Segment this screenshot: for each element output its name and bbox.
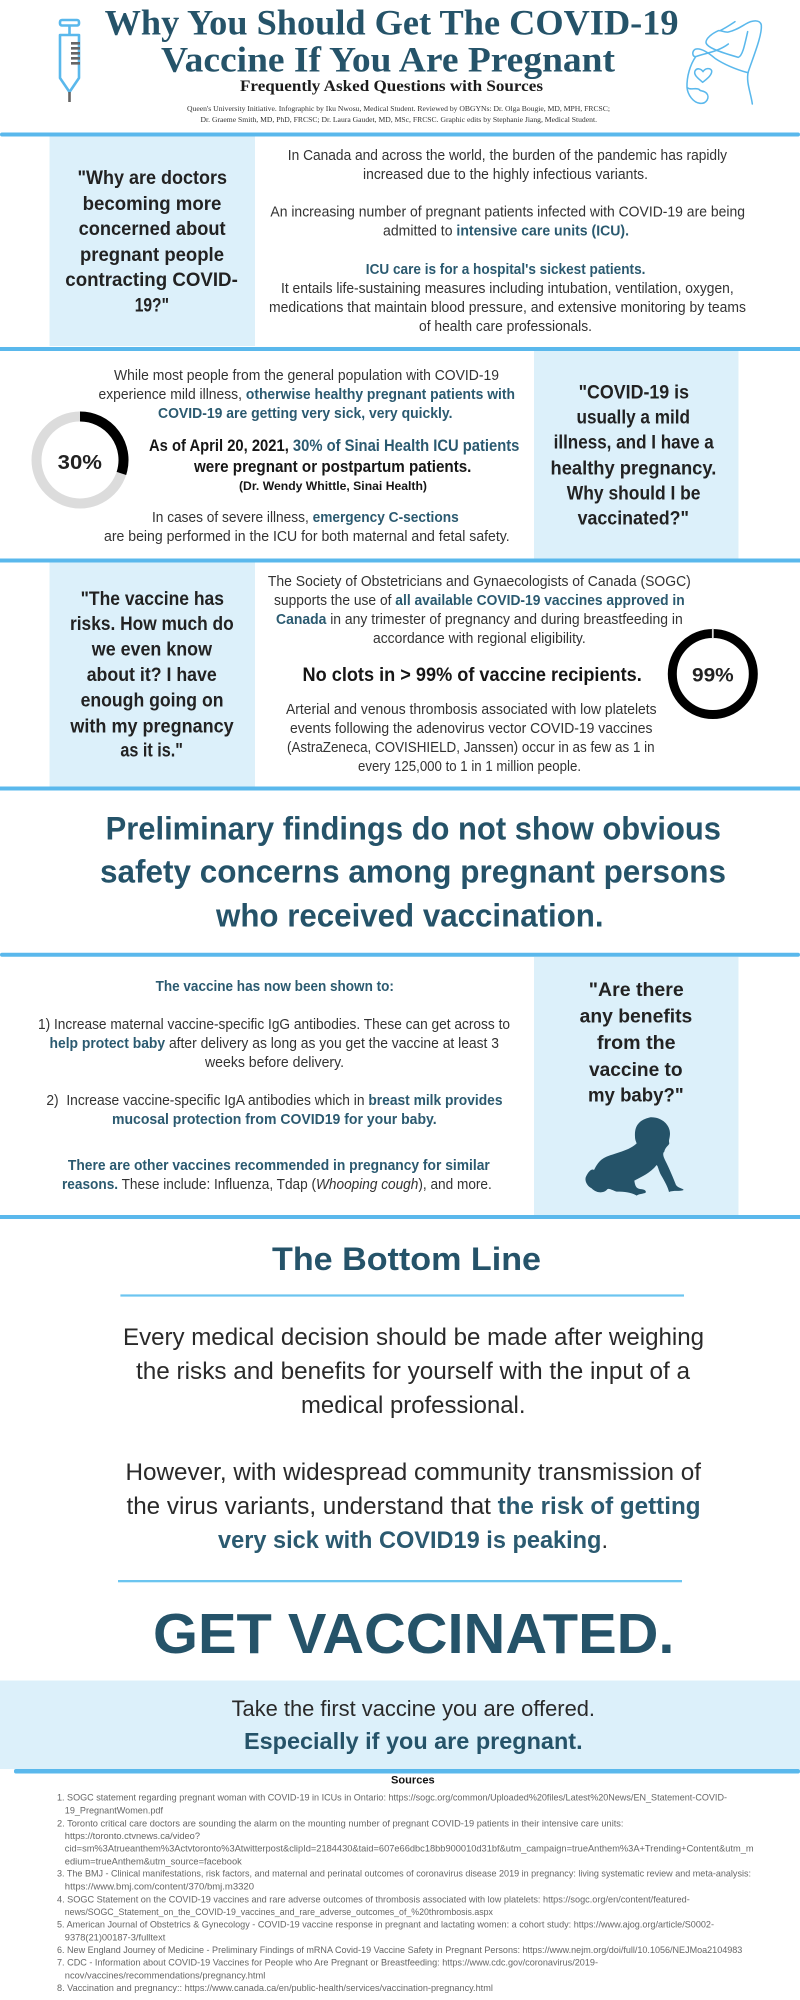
text block: mild illness: COVID-19 are getting very sick, very quickly.: [158, 406, 452, 422]
sources: 5. American Journal of Obstetrics & Gynecology - COVID-19 vaccine response in pregnant and lactating women: a cohort study: https://www.ajog.org/article/S0002-: [57, 1920, 714, 1931]
panel: benefits to baby question: [534, 957, 738, 1215]
text block: mild illness: [98, 368, 515, 422]
question: benefits to baby: any benefits: [580, 1007, 692, 1028]
title: Why You Should Get The COVID-19: [105, 2, 679, 42]
question: why are doctors concerned: contracting COVID-: [65, 270, 238, 291]
text block: thrombosis: events following the adenovirus vector COVID-19 vaccines: [290, 721, 652, 737]
sources: https://toronto.ctvnews.ca/video?: [65, 1831, 200, 1842]
text block: ICU burden: In Canada and across the world, the burden of the pandemic has rapidly: [288, 148, 728, 164]
question: why are doctors concerned: [65, 168, 238, 317]
question: why are doctors concerned: "Why are doctors: [78, 168, 227, 189]
panel: vaccine risks question: [50, 562, 255, 786]
text block: thrombosis: Arterial and venous thrombosis associated with low platelets: [286, 702, 657, 718]
icon: pregnant woman outline: [687, 21, 761, 104]
question: mild illness: healthy pregnancy.: [550, 458, 716, 479]
text block: vaccine benefits: 1) Increase maternal vaccine-specific IgG antibodies. These can get across to: [38, 1017, 510, 1033]
sources: 9378(21)00187-3/fulltext: [65, 1932, 166, 1943]
text block: vaccine benefits: There are other vaccines recommended in pregnancy for similar: [68, 1158, 490, 1174]
question: benefits to baby: my baby?": [588, 1086, 684, 1107]
question: vaccine risks: about it? I have: [87, 665, 217, 686]
panel: take the first vaccine: Especially if you are pregnant.: [244, 1728, 583, 1754]
sources: [57, 1775, 754, 1994]
question: why are doctors concerned: becoming more: [83, 194, 221, 215]
heading: the bottom line: The Bottom Line: [272, 1241, 541, 1277]
text block: SOGC support: [268, 574, 691, 647]
sources: 19_PregnantWomen.pdf: [65, 1805, 163, 1816]
text block: thrombosis: [286, 702, 657, 775]
sources: Sources: [391, 1775, 435, 1787]
text block: mild illness: experience mild illness, otherwise healthy pregnant patients with: [98, 387, 515, 403]
question: vaccine risks: with my pregnancy: [69, 716, 234, 737]
text block: ICU burden: ICU care is for a hospital's sickest patients.: [366, 262, 645, 278]
question: mild illness: vaccinated?": [578, 508, 689, 529]
text block: mild illness: While most people from the general population with COVID-19: [114, 368, 499, 384]
icon: crawling baby: [585, 1117, 684, 1196]
text block: vaccine benefits: help protect baby after delivery as long as you get the vaccine at least 3: [50, 1036, 499, 1052]
question: mild illness: Why should I be: [567, 483, 700, 504]
text block: ICU burden: [269, 148, 746, 335]
stat: Sinai Health ICU: [149, 437, 519, 493]
text block: vaccine benefits: 2) Increase vaccine-specific IgA antibodies which in breast milk provides: [46, 1093, 503, 1109]
panel: why are doctors concerned: [50, 136, 255, 346]
text block: medical decision: medical professional.: [301, 1392, 526, 1419]
text block: vaccine benefits: weeks before delivery.: [204, 1055, 344, 1071]
text block: ICU burden: It entails life-sustaining measures including intubation, ventilation, oxygen,: [281, 281, 734, 297]
question: mild illness: usually a mild: [576, 407, 690, 428]
stat: Sinai Health ICU: As of April 20, 2021, 30% of Sinai Health ICU patients: [149, 437, 519, 455]
subtitle: Frequently Asked Questions with Sources: [240, 78, 543, 95]
chart: 99% donut: 99%: [692, 666, 734, 687]
text block: thrombosis: (AstraZeneca, COVISHIELD, Janssen) occur in as few as 1 in: [287, 740, 655, 756]
sources: 1. SOGC statement regarding pregnant woman with COVID-19 in ICUs in Ontario: https://sogc.org/common/Uploaded%20files/Latest%20News/EN_Statement-COVID-: [57, 1792, 727, 1803]
text block: C-sections: [104, 510, 510, 545]
chart: 30% donut: 30%: [58, 452, 102, 474]
question: mild illness: "COVID-19 is: [579, 382, 689, 403]
text block: SOGC support: Canada in any trimester of pregnancy and during breastfeeding in: [276, 612, 683, 628]
credits: Dr. Graeme Smith, MD, PhD, FRCSC; Dr. Laura Gaudet, MD, MSc, FRCSC. Graphic edits by Stephanie Jiang, Medical Student.: [200, 115, 597, 124]
question: benefits to baby: from the: [597, 1033, 676, 1054]
question: why are doctors concerned: concerned about: [79, 219, 226, 240]
sources: 2. Toronto critical care doctors are sounding the alarm on the mounting number of pregnant COVID-19 patients in their intensive care units:: [57, 1819, 624, 1830]
stat: Sinai Health ICU: were pregnant or postpartum patients.: [193, 458, 471, 476]
question: why are doctors concerned: 19?": [135, 296, 169, 317]
icon: syringe: [60, 20, 80, 102]
question: vaccine risks: as it is.": [120, 741, 183, 762]
text block: thrombosis: every 125,000 to 1 in 1 million people.: [358, 759, 581, 775]
sources: 8. Vaccination and pregnancy:: https://www.canada.ca/en/public-health/services/vaccination-pregnancy.html: [57, 1983, 493, 1994]
question: mild illness: illness, and I have a: [554, 432, 714, 453]
title: [105, 2, 679, 80]
question: vaccine risks: [69, 589, 234, 762]
credits: Queen's University Initiative. Infographic by Iku Nwosu, Medical Student. Reviewed by OBGYNs: Dr. Olga Bougie, MD, MPH, FRCSC;: [187, 104, 610, 113]
sources: ncov/vaccines/recommendations/pregnancy.html: [65, 1970, 265, 1981]
text block: vaccine benefits: mucosal protection from COVID19 for your baby.: [112, 1112, 437, 1128]
heading: preliminary findings: [100, 810, 726, 933]
question: benefits to baby: vaccine to: [589, 1060, 683, 1081]
sources: news/SOGC_Statement_on_the_COVID-19_vaccines_and_rare_adverse_outcomes_of_%20thrombosis.aspx: [65, 1907, 493, 1918]
text block: ICU burden: admitted to intensive care units (ICU).: [383, 224, 629, 240]
text block: medical decision: very sick with COVID19 is peaking.: [218, 1527, 608, 1554]
text block: SOGC support: The Society of Obstetricians and Gynaecologists of Canada (SOGC): [268, 574, 691, 590]
text block: medical decision: the risks and benefits for yourself with the input of a: [136, 1358, 691, 1385]
question: mild illness: [550, 382, 716, 529]
question: why are doctors concerned: pregnant people: [80, 245, 224, 266]
text block: vaccine benefits: [38, 979, 510, 1193]
text block: medical decision: the virus variants, understand that the risk of getting: [126, 1493, 700, 1520]
text block: medical decision: Every medical decision should be made after weighing: [123, 1324, 704, 1351]
text block: ICU burden: of health care professionals.: [419, 319, 592, 335]
sources: cid=sm%3Atrueanthem%3Actvtoronto%3Atwitterpost&clipId=2184430&taid=607e66dbc18bb900010d31bf&utm_campaign=trueAnthem%3A+Trending+Content&utm_m: [65, 1844, 754, 1855]
question: vaccine risks: enough going on: [81, 690, 223, 711]
sources: 3. The BMJ - Clinical manifestations, risk factors, and maternal and perinatal outcomes of coronavirus disease 2019 in pregnancy: living systematic review and meta-analysis:: [57, 1869, 751, 1880]
sources: https://www.bmj.com/content/370/bmj.m3320: [65, 1881, 254, 1892]
chart: 99% donut: [672, 628, 753, 714]
text block: ICU burden: An increasing number of pregnant patients infected with COVID-19 are being: [270, 205, 745, 221]
text block: C-sections: are being performed in the ICU for both maternal and fetal safety.: [104, 529, 510, 545]
title: Vaccine If You Are Pregnant: [161, 40, 615, 80]
text block: medical decision: However, with widespread community transmission of: [126, 1459, 701, 1486]
sources: edium=trueAnthem&utm_source=facebook: [65, 1856, 242, 1867]
text block: SOGC support: supports the use of all available COVID-19 vaccines approved in: [274, 593, 685, 609]
text block: C-sections: In cases of severe illness, emergency C-sections: [152, 510, 459, 526]
sources: 6. New England Journey of Medicine - Preliminary Findings of mRNA Covid-19 Vaccine Safety in Pregnant Persons: https://www.nejm.org/doi/full/10.1056/NEJMoa2104983: [57, 1945, 742, 1956]
text block: vaccine benefits: reasons. These include: Influenza, Tdap (Whooping cough), and more.: [62, 1177, 492, 1193]
heading: preliminary findings: who received vaccination.: [215, 897, 604, 933]
stat: Sinai Health ICU: (Dr. Wendy Whittle, Sinai Health): [239, 479, 427, 493]
question: vaccine risks: risks. How much do: [70, 614, 234, 635]
question: benefits to baby: "Are there: [589, 980, 684, 1001]
stat: no clots: No clots in > 99% of vaccine recipients.: [302, 664, 642, 686]
text block: vaccine benefits: The vaccine has now been shown to:: [156, 979, 394, 995]
text block: ICU burden: medications that maintain blood pressure, and extensive monitoring by teams: [269, 300, 746, 316]
panel: mild illness question: [534, 351, 738, 558]
question: vaccine risks: "The vaccine has: [81, 589, 224, 610]
text block: ICU burden: increased due to the highly infectious variants.: [363, 167, 648, 183]
heading: preliminary findings: Preliminary findings do not show obvious: [106, 810, 721, 846]
panel: take the first vaccine: Take the first vaccine you are offered.: [232, 1696, 595, 1721]
sources: 4. SOGC Statement on the COVID-19 vaccines and rare adverse outcomes of thrombosis associated with low platelets: https://sogc.org/en/content/featured-: [57, 1894, 690, 1905]
question: vaccine risks: we even know: [91, 640, 212, 661]
chart: 30% donut: [36, 416, 124, 504]
text block: SOGC support: accordance with regional eligibility.: [373, 631, 586, 647]
question: benefits to baby: [580, 980, 692, 1107]
heading: get vaccinated: GET VACCINATED.: [153, 1602, 674, 1666]
heading: preliminary findings: safety concerns among pregnant persons: [100, 854, 726, 890]
text block: medical decision: [123, 1324, 704, 1554]
credits: [187, 104, 610, 124]
sources: 7. CDC - Information about COVID-19 Vaccines for People who Are Pregnant or Breastfeeding: https://www.cdc.gov/coronavirus/2019-: [57, 1958, 598, 1969]
panel: take the first vaccine: [0, 1680, 800, 1769]
